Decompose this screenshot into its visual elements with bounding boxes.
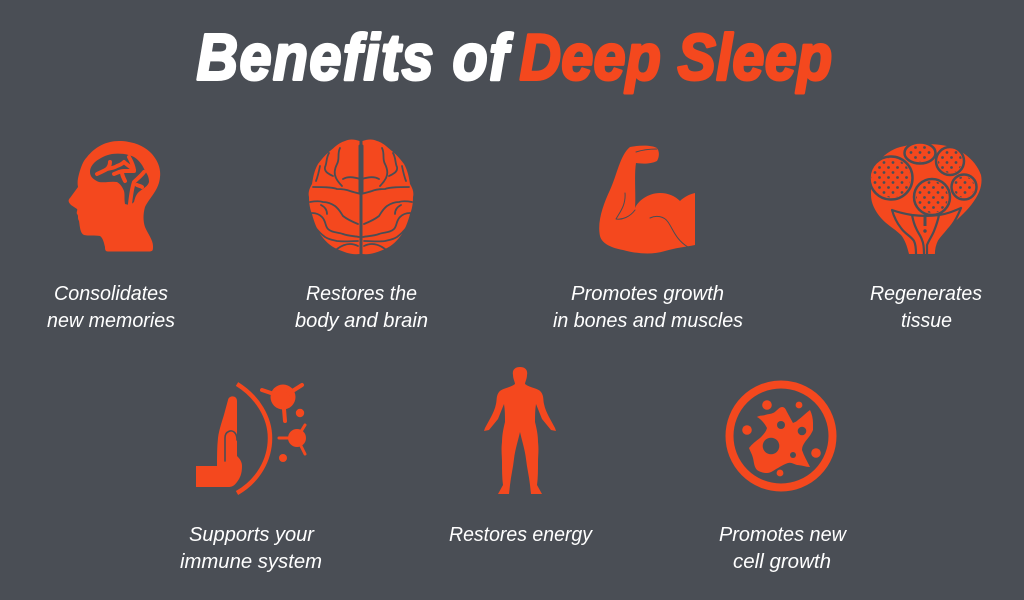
caption: restores energy: Restores energy: [449, 524, 593, 546]
caption: regenerates tissue: tissue: [901, 310, 952, 332]
icon: flexed arm: [599, 146, 695, 254]
caption: consolidates new memories: Consolidates: [54, 283, 168, 305]
caption: consolidates new memories: new memories: [47, 310, 175, 332]
caption: restores the body and brain: body and brain: [295, 310, 428, 332]
panel: regenerates tissue: [870, 142, 982, 332]
icon: hand shielding from viruses: [196, 384, 306, 493]
caption: promotes growth in bones and muscles: [553, 283, 743, 332]
title: Deep Sleep: [520, 21, 832, 93]
icon: tissue cells: [870, 142, 982, 254]
caption: promotes new cell growth: cell growth: [733, 551, 831, 573]
caption: promotes growth in bones and muscles: Promotes growth: [571, 283, 724, 305]
panel: restores energy: [449, 367, 593, 546]
caption: promotes new cell growth: [719, 524, 848, 573]
caption: restores the body and brain: Restores the: [306, 283, 417, 305]
icon: cell in petri dish: [730, 384, 832, 488]
icon: human body: [484, 367, 556, 494]
panel: promotes growth in bones and muscles: [553, 146, 743, 332]
caption: supports your immune system: Supports your: [189, 524, 315, 546]
caption: regenerates tissue: Regenerates: [870, 283, 982, 305]
icon: head with brain: [69, 141, 160, 252]
caption: consolidates new memories: [47, 283, 175, 332]
title: Benefits of: [197, 21, 513, 93]
caption: supports your immune system: immune system: [180, 551, 322, 573]
caption: promotes growth in bones and muscles: in bones and muscles: [553, 310, 743, 332]
icon: brain top view: [309, 140, 413, 254]
panel: restores the body and brain: [295, 140, 428, 332]
caption: supports your immune system: [180, 524, 322, 573]
caption: regenerates tissue: [870, 283, 982, 332]
title: [197, 21, 832, 93]
caption: restores the body and brain: [295, 283, 428, 332]
panel: consolidates new memories: [47, 141, 175, 332]
caption: promotes new cell growth: Promotes new: [719, 524, 848, 546]
panel: supports your immune system: [180, 384, 322, 573]
panel: promotes new cell growth: [719, 384, 848, 573]
